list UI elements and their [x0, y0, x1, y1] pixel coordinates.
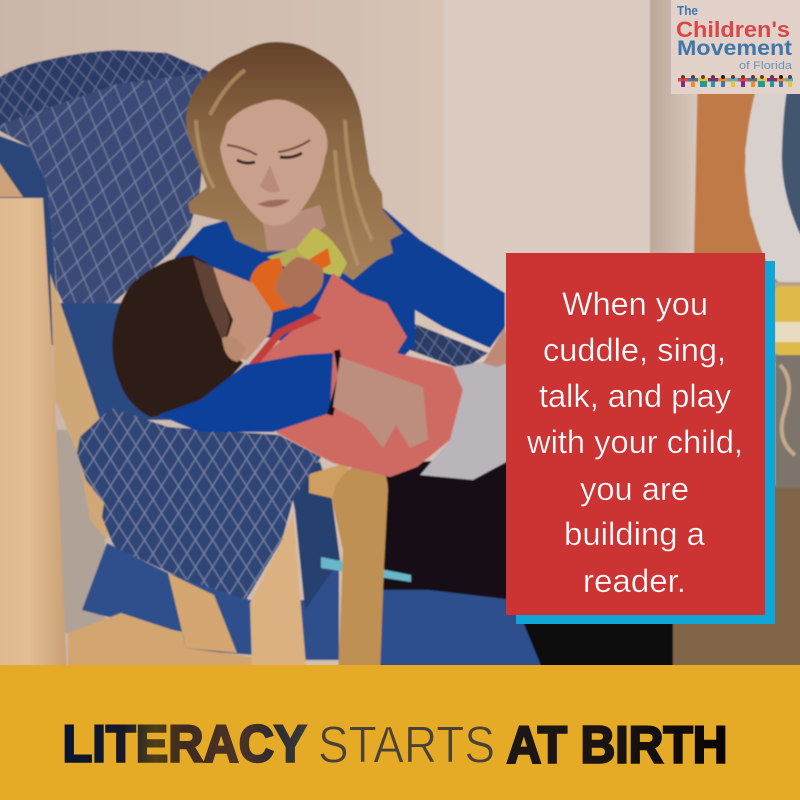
mother's other hand — [483, 327, 510, 367]
callout: red panel with message: talk, and play — [539, 378, 731, 414]
heading: Literacy Starts at Birth — [62, 716, 728, 774]
orange wall panel — [694, 0, 800, 330]
logo text: Children's: Children's — [676, 17, 790, 42]
logo text: Movement: Movement — [677, 37, 792, 60]
sippy cup — [250, 228, 347, 313]
mother's neck — [263, 205, 326, 250]
child's face — [213, 267, 273, 360]
mother's hair — [186, 42, 403, 280]
wall gap below rail — [55, 430, 105, 633]
logo panel — [671, 0, 800, 94]
cyan toy strip — [321, 557, 411, 582]
heading: Literacy Starts at Birth: LITERACY — [62, 716, 306, 774]
callout: red panel with message: When you — [562, 286, 708, 322]
child's scalp parting — [193, 258, 230, 345]
mother's face — [220, 100, 328, 226]
heading: Literacy Starts at Birth: AT BIRTH — [506, 716, 728, 774]
chair base and struts — [68, 513, 309, 700]
mother's blue top — [175, 208, 505, 370]
heading: Literacy Starts at Birth: STARTS — [318, 716, 495, 774]
child's hair — [112, 255, 243, 417]
child's ear — [222, 336, 246, 362]
blue seat back — [60, 303, 200, 420]
hair highlights — [196, 70, 372, 265]
footer band — [0, 665, 800, 800]
callout: red panel with message: cuddle, sing, — [543, 332, 726, 368]
chair back cushion — [0, 72, 210, 303]
mother's hand on child — [333, 357, 428, 448]
child's hand on cup — [275, 257, 324, 307]
mother's sleeve around child — [158, 353, 333, 432]
wall background — [0, 0, 445, 700]
callout: red panel with message: building a — [564, 516, 705, 552]
callout: red panel with message: you are — [580, 471, 689, 507]
seat cushion right — [379, 590, 555, 700]
child's pink sweater — [250, 273, 463, 477]
logo icon: row of paper-doll children — [678, 75, 793, 87]
child's leggings — [420, 357, 510, 480]
right arm cushion under mother's arm — [410, 322, 488, 370]
callout: red panel with message: reader. — [583, 563, 686, 599]
logo text: of Florida: of Florida — [739, 60, 793, 72]
blue side strip — [0, 125, 72, 345]
callout: red panel with message: with your child, — [526, 424, 743, 460]
dark lap and legs — [380, 455, 510, 600]
arm quilt cushion — [77, 408, 321, 600]
blue strip and dark gap — [293, 462, 340, 610]
seat cushion blue — [82, 543, 339, 660]
logo text: The: The — [677, 4, 698, 18]
wooden arm and post — [309, 462, 388, 700]
callout: blue offset shadow — [516, 261, 775, 624]
chair back top band — [0, 50, 210, 135]
round window — [745, 0, 800, 300]
bracelet — [330, 350, 341, 415]
mother's facial features — [227, 140, 310, 207]
wooden frame — [0, 120, 112, 700]
callout: red panel with message — [506, 253, 765, 615]
child's bib — [247, 313, 322, 372]
right side wall strip, toy, rocker and floor — [765, 282, 800, 362]
